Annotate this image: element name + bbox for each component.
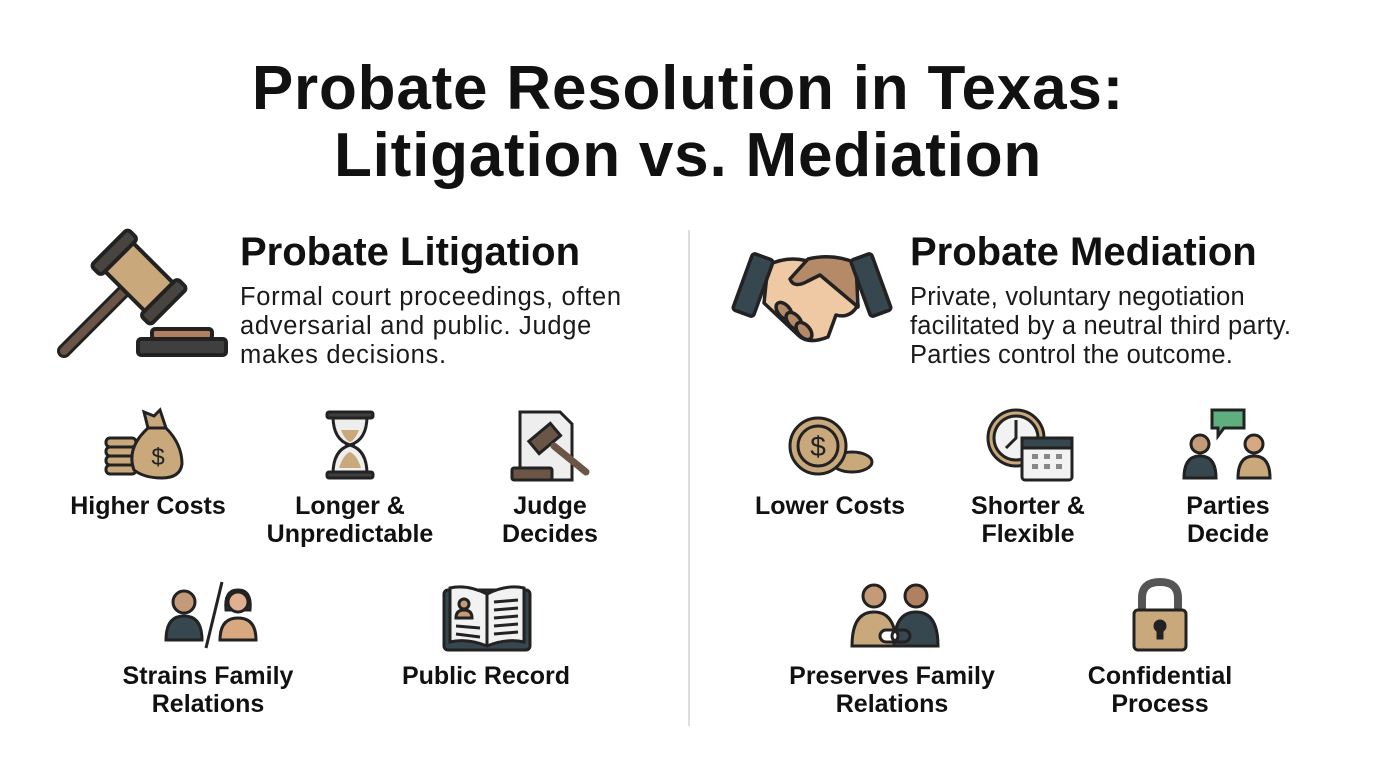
description xyxy=(910,283,1291,369)
icon: handshake xyxy=(732,252,892,342)
item: preserves family xyxy=(789,584,995,718)
item: longer: Longer & xyxy=(295,492,405,520)
item: parties decide xyxy=(1182,408,1272,548)
description xyxy=(240,283,622,369)
item: lower costs: $ xyxy=(810,431,826,462)
item: lower costs xyxy=(755,416,905,520)
item: strains family: Relations xyxy=(152,690,264,718)
item: lower costs: Lower Costs xyxy=(755,492,905,520)
panel: litigation xyxy=(57,228,622,718)
item: judge decides: Judge xyxy=(513,492,587,520)
description: Private, voluntary negotiation xyxy=(910,283,1245,311)
description: Formal court proceedings, often xyxy=(240,283,622,311)
item: strains family: Strains Family xyxy=(123,662,293,690)
description: makes decisions. xyxy=(240,341,447,369)
description: facilitated by a neutral third party. xyxy=(910,312,1291,340)
item: public record: Public Record xyxy=(402,662,570,690)
divider xyxy=(688,230,690,726)
item: strains family xyxy=(123,582,294,718)
title: Probate Resolution in Texas: xyxy=(252,54,1124,123)
item: preserves family: Relations xyxy=(836,690,948,718)
item: shorter: Flexible xyxy=(981,520,1075,548)
item: higher costs: $ xyxy=(151,444,165,471)
item: higher costs: Higher Costs xyxy=(70,492,226,520)
title xyxy=(252,54,1124,190)
heading: Probate Litigation xyxy=(240,230,580,274)
description: Parties control the outcome. xyxy=(910,341,1233,369)
item: judge decides: Decides xyxy=(502,520,598,548)
item: longer: Unpredictable xyxy=(267,520,433,548)
item: judge decides xyxy=(502,410,598,548)
item: public record xyxy=(402,585,570,690)
title: Litigation vs. Mediation xyxy=(334,121,1042,190)
item: shorter: Shorter & xyxy=(971,492,1085,520)
item: parties decide: Decide xyxy=(1187,520,1269,548)
item: confidential: Process xyxy=(1111,690,1209,718)
item: longer xyxy=(267,410,433,548)
icon: gavel xyxy=(57,228,228,358)
item: confidential xyxy=(1088,578,1232,718)
item: confidential: Confidential xyxy=(1088,662,1232,690)
item: shorter xyxy=(971,408,1085,548)
item: preserves family: Preserves Family xyxy=(789,662,995,690)
heading: Probate Mediation xyxy=(910,230,1257,274)
panel: mediation xyxy=(732,230,1291,718)
item: higher costs xyxy=(70,407,226,520)
item: parties decide: Parties xyxy=(1186,492,1270,520)
description: adversarial and public. Judge xyxy=(240,312,592,340)
